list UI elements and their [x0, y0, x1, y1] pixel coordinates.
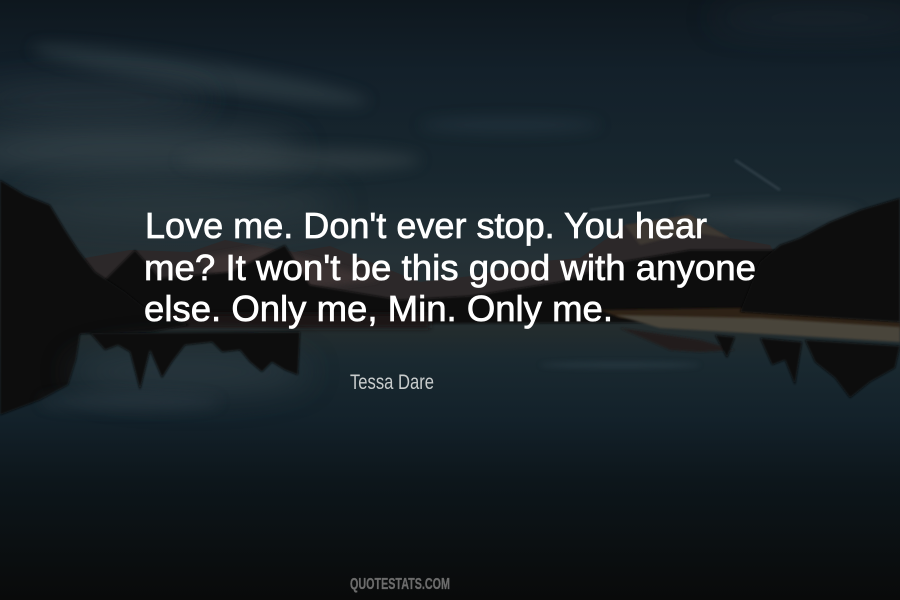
- author: Tessa Dare: [350, 371, 434, 394]
- quote line 3: else. Only me, Min. Only me.: [144, 288, 613, 329]
- treeline: [100, 245, 820, 325]
- right forested mountain: [740, 198, 900, 322]
- distant mountains: [85, 215, 800, 320]
- watermark: QUOTESTATS.COM: [350, 576, 450, 593]
- water light patches: [40, 348, 700, 410]
- quote text: [144, 205, 756, 329]
- quote line 1: Love me. Don't ever stop. You hear: [145, 205, 707, 246]
- quote line 2: me? It won't be this good with anyone: [144, 247, 756, 288]
- left mountain with its reflection: [0, 180, 190, 415]
- sky clouds: [0, 6, 900, 225]
- shoreline: [90, 308, 900, 342]
- tree reflections in water: [90, 328, 900, 398]
